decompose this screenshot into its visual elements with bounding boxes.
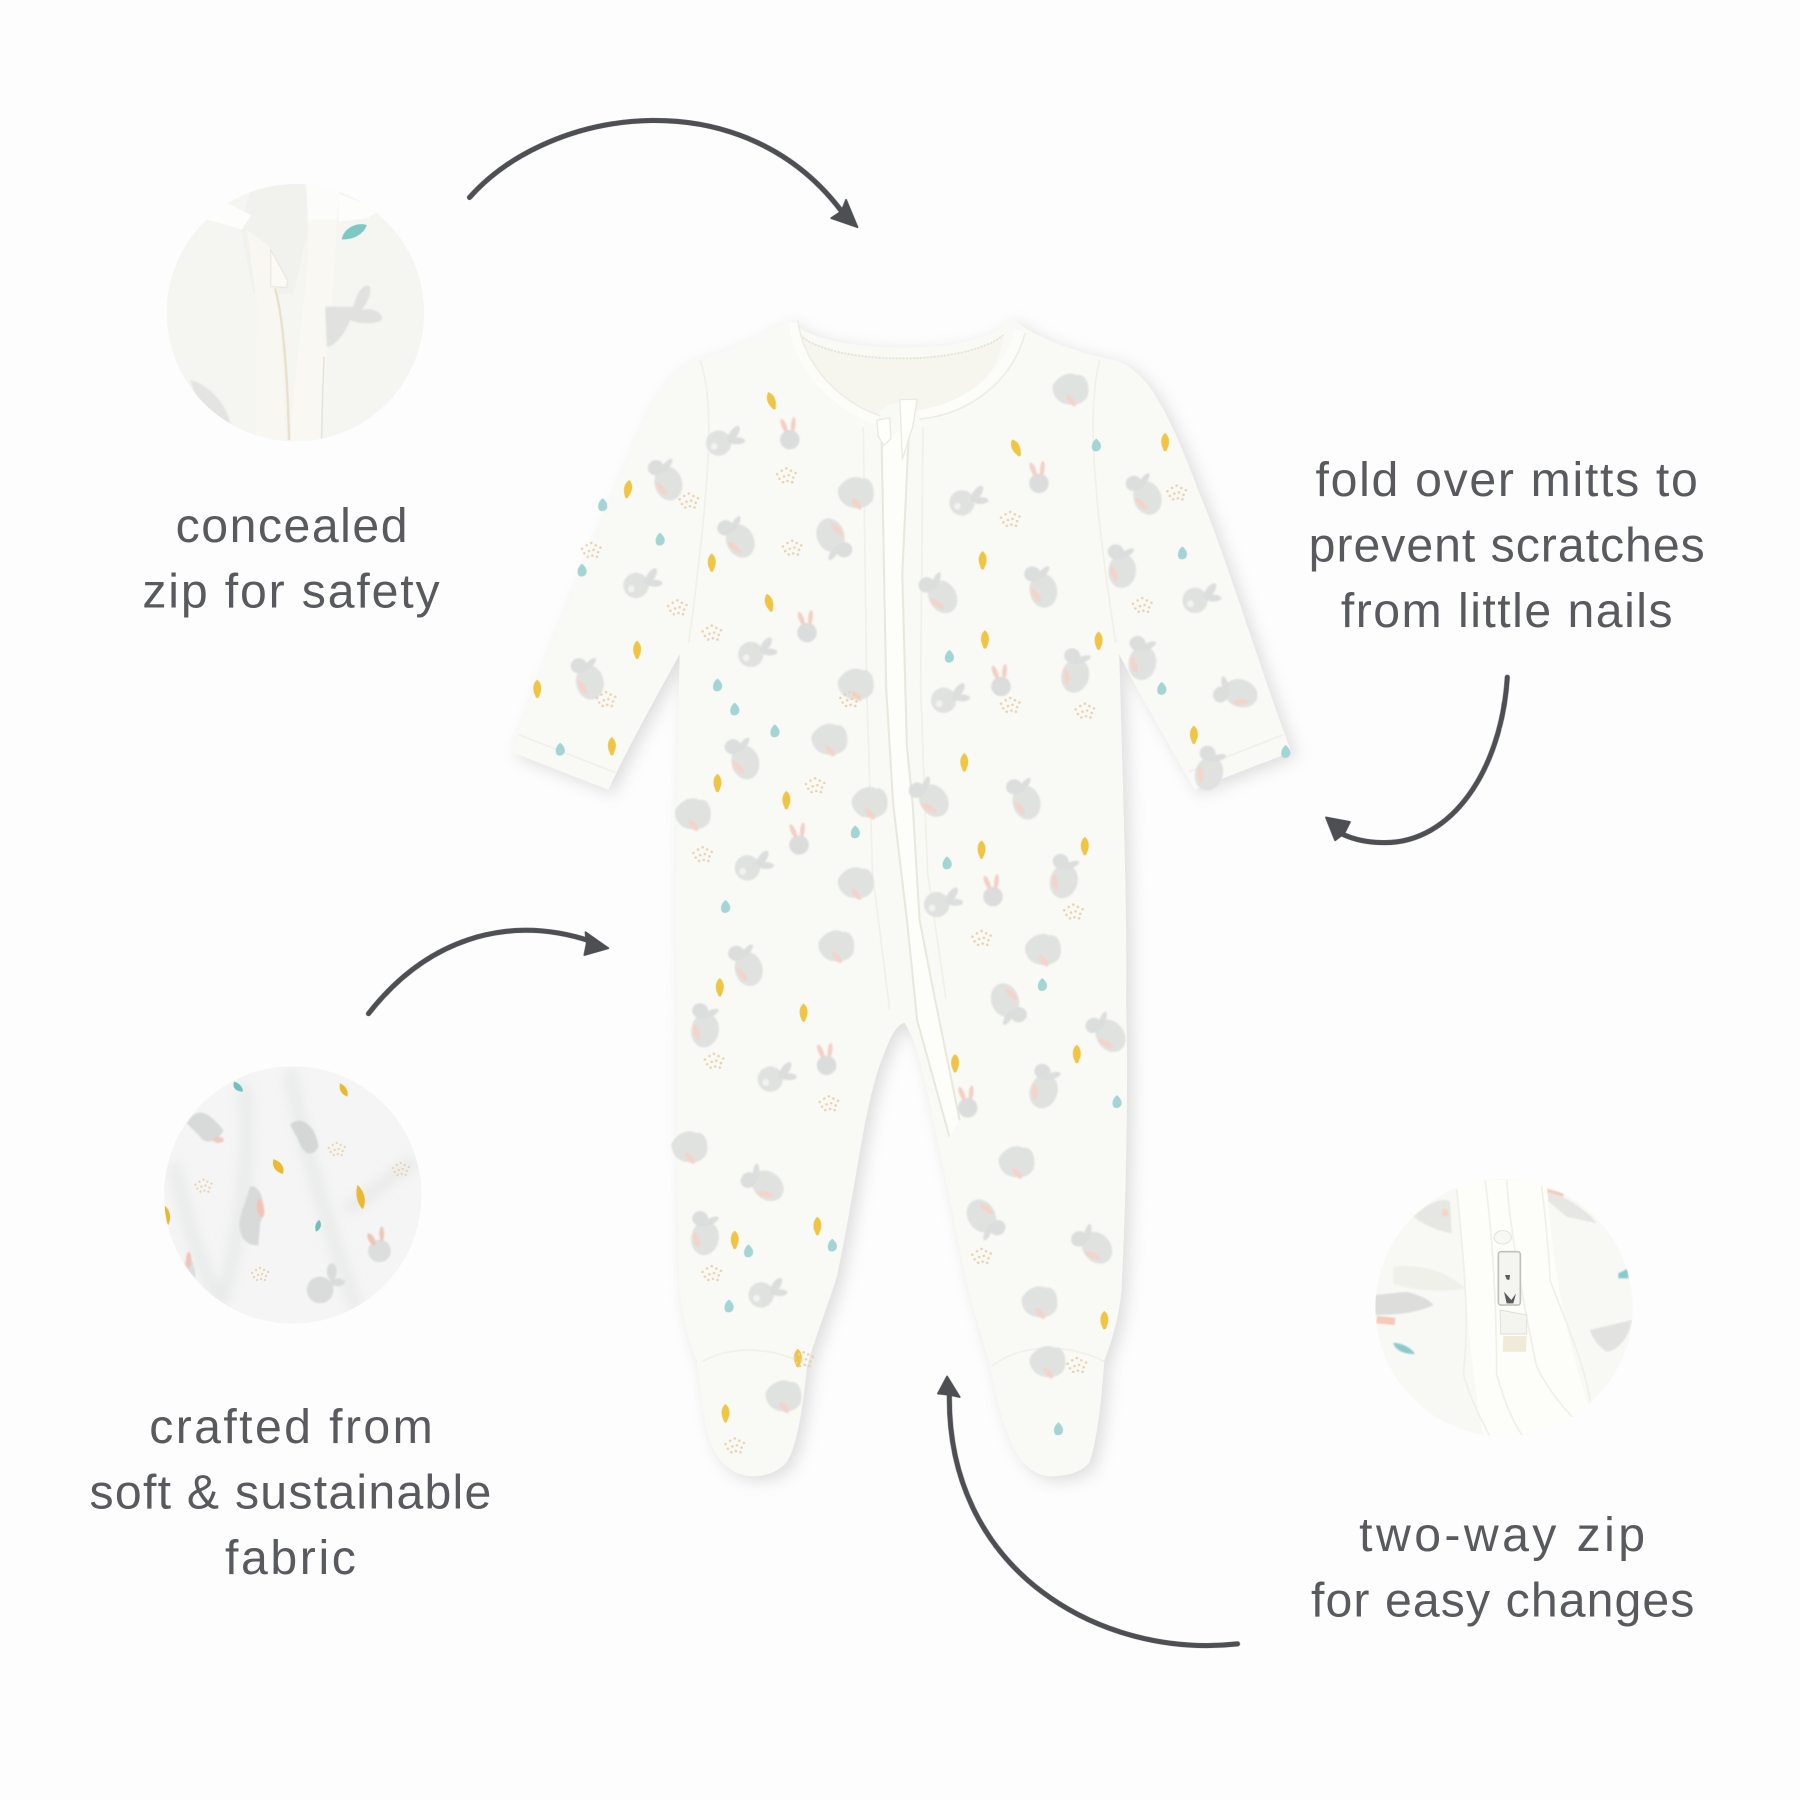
print: wheat leaves: [533, 391, 1198, 1422]
zip metal pull: [1498, 1252, 1520, 1305]
zip slider top: [1494, 1231, 1511, 1244]
arrow: to sleeve mitt: [1326, 677, 1507, 843]
garment body: [511, 320, 1291, 1476]
central placket: [1543, 1188, 1548, 1202]
circle photo: concealed zip: [160, 180, 433, 447]
text: crafted from soft and sustainable fabric: [90, 1400, 491, 1585]
teal drops: [233, 1082, 243, 1092]
zip pull end: [1500, 1310, 1527, 1334]
text: crafted from soft and sustainable fabric: soft & sustainable: [90, 1465, 491, 1519]
zip opening: [1503, 1336, 1527, 1352]
print: bunnies: [570, 374, 1262, 1415]
text: crafted from soft and sustainable fabric: crafted from: [149, 1400, 433, 1454]
zip placket: [882, 425, 960, 1136]
text: two-way zip for easy changes: for easy changes: [1311, 1573, 1694, 1627]
collar band left: [208, 204, 252, 229]
teal leaf: [342, 224, 367, 239]
arrow: to leg zip: [938, 1376, 1238, 1646]
fabric folds: [175, 1081, 408, 1301]
zip tab: [271, 250, 287, 287]
fabric base: [167, 192, 424, 441]
text: concealed zip for safety: zip for safety: [142, 564, 440, 618]
text: fold over mitts: fold over mitts to: [1316, 453, 1698, 507]
text: two-way zip for easy changes: two-way zip: [1359, 1508, 1645, 1562]
fabric base: [1373, 1177, 1637, 1443]
print: seed dots: [581, 467, 1187, 1453]
text: concealed zip for safety: concealed: [176, 499, 408, 553]
text: fold over mitts: prevent scratches: [1309, 518, 1705, 572]
seams: [519, 360, 1283, 1366]
fabric base: [160, 1063, 427, 1330]
bunny print: [325, 286, 382, 347]
circle photo: two-way zip: [1373, 1177, 1637, 1443]
garment shadow: [517, 325, 1297, 1481]
left placket: [247, 230, 287, 447]
text: fold over mitts: from little nails: [1341, 584, 1673, 638]
print: teal drops: [556, 439, 1290, 1435]
text: crafted from soft and sustainable fabric: fabric: [225, 1531, 356, 1585]
arrow: to body fabric: [368, 930, 608, 1014]
text: fold over mitts: [1309, 453, 1705, 638]
centre ridge: [290, 217, 337, 447]
collar interior: [240, 180, 310, 293]
wheat leaves: [340, 1083, 348, 1097]
collar band right: [338, 194, 376, 222]
front collar band: [793, 323, 1019, 420]
arrow: to top of sleepsuit: [470, 121, 858, 227]
zip slit: [275, 288, 289, 440]
neck interior: [799, 335, 1003, 416]
text: two-way zip for easy changes: [1311, 1508, 1694, 1627]
bunnies: [183, 1113, 391, 1303]
back collar stitching: [800, 335, 1003, 358]
gray print blobs: [1375, 1188, 1632, 1354]
text: concealed zip for safety: [142, 499, 440, 618]
garment: white sleepsuit with bunny print: [511, 320, 1297, 1481]
circle photo: soft fabric: [160, 1063, 427, 1330]
zip pull: [877, 399, 917, 459]
seed dot clusters: [194, 1179, 212, 1193]
